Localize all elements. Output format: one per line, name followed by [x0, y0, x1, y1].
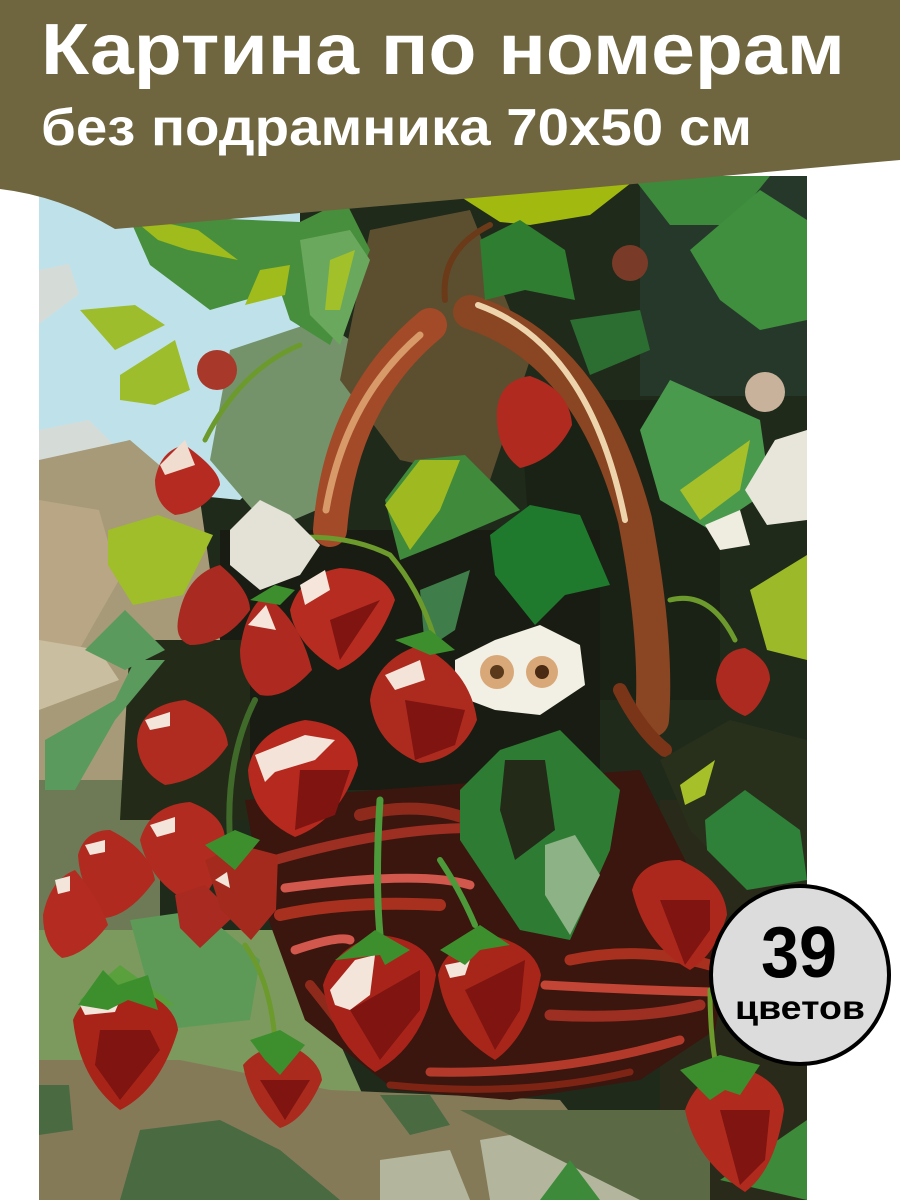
- big berry left: [248, 720, 358, 837]
- big berry center: [370, 645, 477, 763]
- title: Картина по номерам: [41, 10, 845, 90]
- painting background: [39, 176, 807, 1200]
- strawberry calyxes: [78, 585, 760, 1100]
- badge: 39 colours: [711, 886, 889, 1064]
- lower left cluster: [140, 802, 225, 894]
- basket: [245, 770, 730, 1100]
- berry white flecks: [55, 712, 470, 1015]
- berry top center: [497, 376, 572, 468]
- badge number: 39: [761, 913, 837, 993]
- basket handle: [326, 305, 665, 750]
- berry bottom left: [73, 985, 178, 1110]
- painting: strawberries in a basket: [39, 176, 807, 1200]
- flowers: [197, 245, 807, 715]
- bottom basket berries: [323, 935, 436, 1072]
- berry right: [632, 860, 727, 970]
- header banner: [0, 0, 900, 229]
- berry dark shading: [95, 600, 770, 1185]
- strawberries: [43, 376, 784, 1192]
- stems: [205, 225, 735, 1060]
- badge label: цветов: [735, 989, 865, 1026]
- berry cluster: [178, 565, 250, 645]
- berry upper left: [155, 445, 220, 515]
- subtitle: без подрамника 70х50 см: [41, 99, 752, 157]
- berry left: [137, 700, 228, 785]
- leaves: [45, 176, 807, 1200]
